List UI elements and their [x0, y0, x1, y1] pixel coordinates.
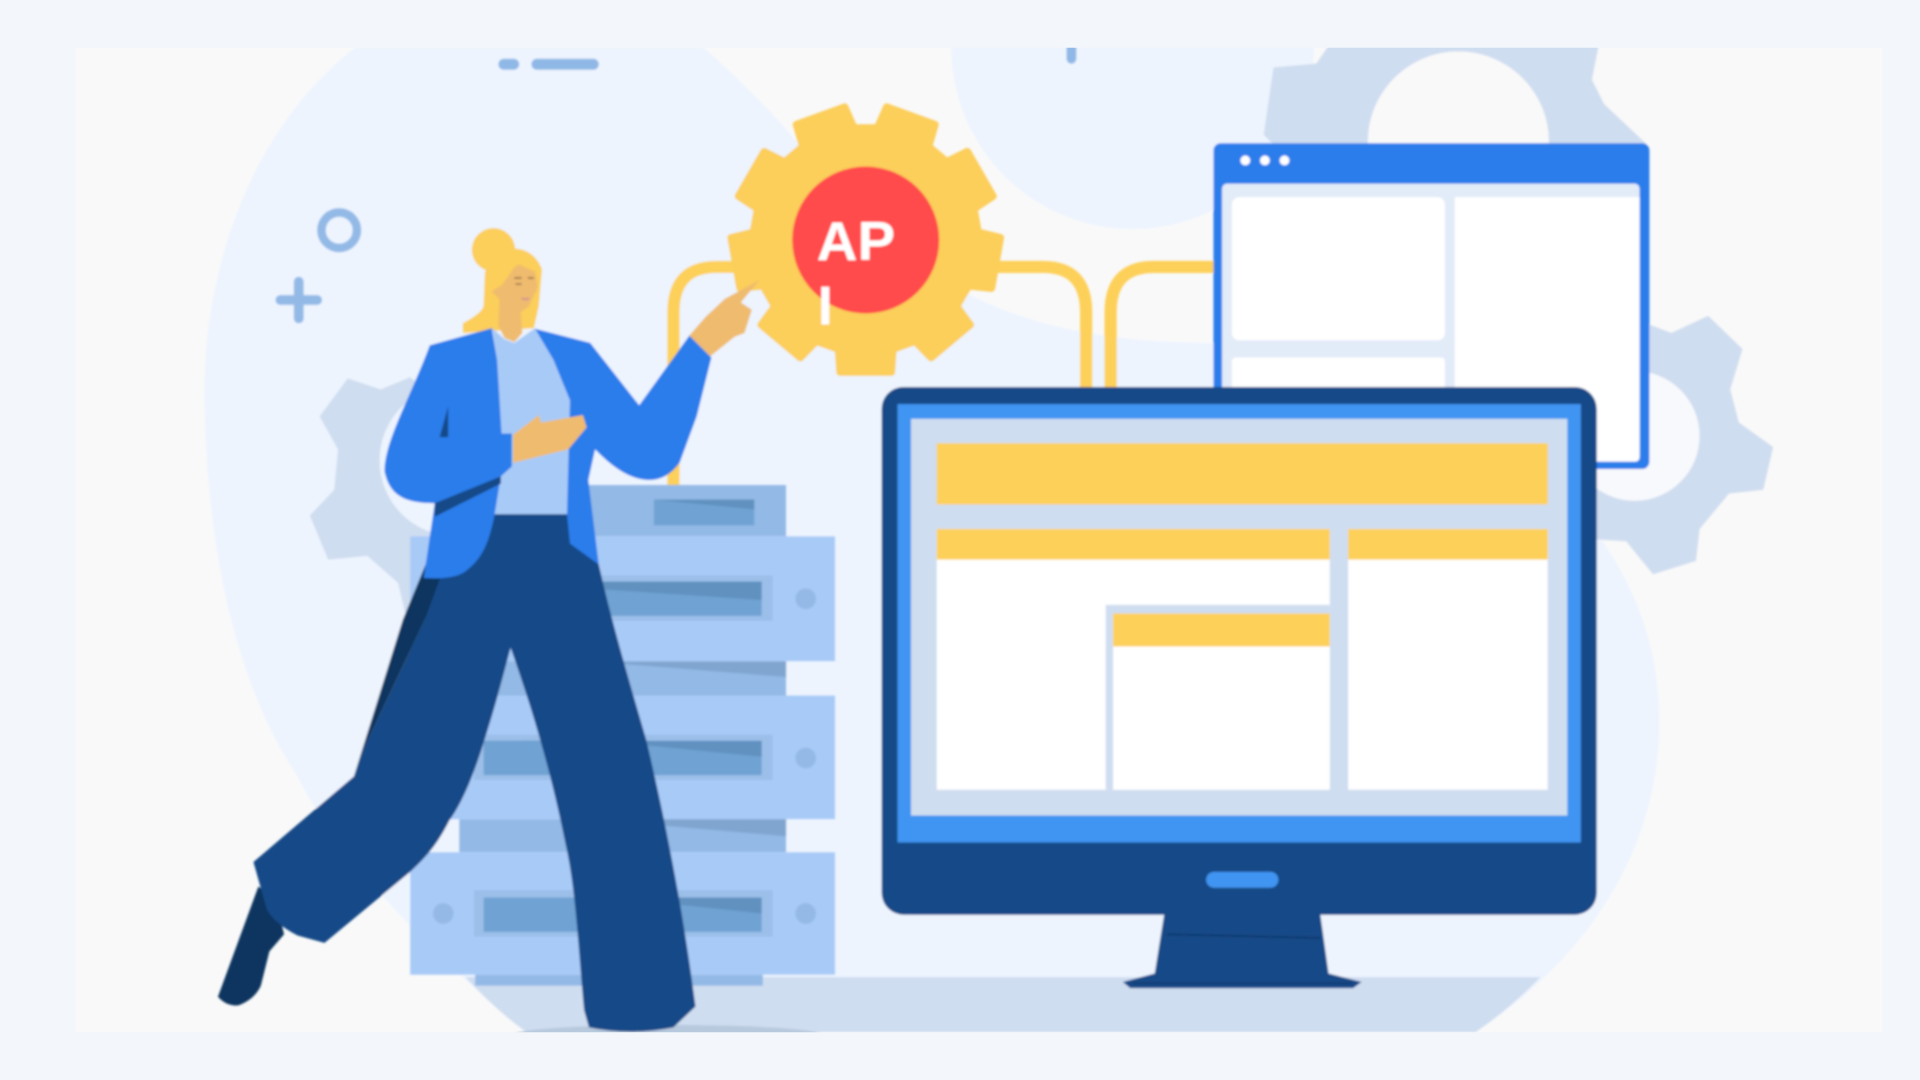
connector lines [673, 267, 1218, 490]
window left upper pane [1232, 197, 1445, 340]
screen right pane [1348, 529, 1548, 790]
screen content area [911, 419, 1567, 816]
server foot [475, 975, 763, 986]
monitor [882, 387, 1597, 988]
icon: background gear top right [1264, 48, 1648, 146]
window right pane [1455, 197, 1640, 462]
server connector upper [459, 661, 786, 696]
screen left pane [937, 529, 1330, 790]
icon: background gear right [1570, 316, 1773, 574]
screen popover card [1106, 605, 1330, 790]
server top unit [589, 485, 786, 536]
hair [463, 228, 542, 333]
screen banner [937, 443, 1548, 504]
trailing foot [218, 887, 284, 1005]
scene contents [204, 0, 1773, 1044]
icon: top decorative pills [497, 48, 1078, 71]
icon: API gear [731, 107, 1000, 372]
jacket dart [440, 407, 448, 437]
window left lower pane [1231, 357, 1446, 388]
monitor stand [1123, 912, 1362, 988]
monitor power button [1206, 872, 1278, 888]
panel: browser window [1213, 143, 1649, 469]
person pointing at gear [218, 228, 759, 1032]
window control dots [1240, 156, 1289, 165]
face and neck [492, 265, 537, 342]
monitor body [882, 387, 1597, 915]
jacket left side [384, 328, 512, 578]
server unit 2 [410, 696, 835, 819]
server unit 1 [410, 536, 835, 661]
API label wrapped letter: I [818, 274, 833, 336]
trouser shadow [354, 563, 443, 776]
floor [466, 976, 1540, 1032]
jacket right side [535, 329, 711, 564]
server connector lower [459, 819, 786, 852]
pointing hand [689, 280, 759, 356]
background blob [204, 0, 1659, 1032]
trousers [253, 514, 696, 1032]
server stack [410, 485, 835, 986]
icon: decorative ring [321, 212, 357, 248]
icon: background gear left [310, 377, 432, 615]
jacket sleeve shadow [435, 476, 501, 517]
illustration: API integration scene [216, 48, 1773, 1032]
API label: AP [817, 210, 895, 272]
shirt [492, 328, 571, 516]
icon: decorative plus [280, 282, 317, 318]
server unit 3 [410, 852, 835, 975]
hand on chest [513, 415, 587, 463]
monitor screen [898, 404, 1581, 842]
API badge circle [792, 167, 939, 313]
